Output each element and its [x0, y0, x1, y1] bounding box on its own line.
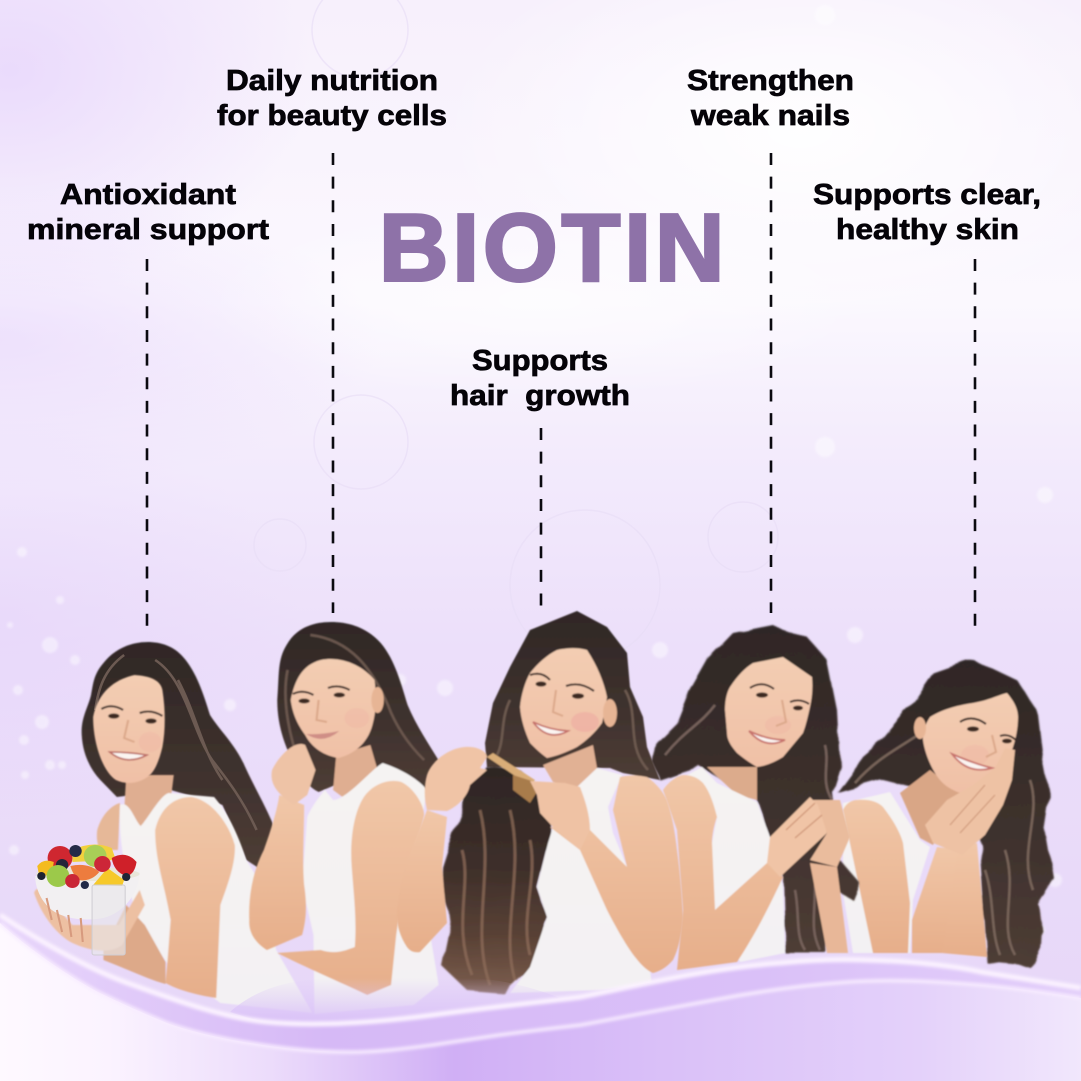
- label: supports clear healthy skin: healthy skin: [836, 214, 1019, 246]
- wooden comb: [487, 753, 537, 803]
- label: supports hair growth: hair growth: [450, 380, 630, 412]
- bowl of fruit: [35, 844, 140, 919]
- woman 5: hands to cheek: [837, 659, 1053, 967]
- label: antioxidant mineral support: [27, 179, 269, 246]
- label: daily nutrition for beauty cells: for beauty cells: [217, 100, 447, 132]
- woman 1: holding fruit bowl and water: [34, 642, 312, 1013]
- label: supports clear healthy skin: [813, 179, 1041, 246]
- water glass: [92, 885, 125, 955]
- label: strengthen weak nails: Strengthen: [687, 65, 854, 97]
- label: strengthen weak nails: [687, 65, 854, 132]
- label: antioxidant mineral support: mineral support: [27, 214, 269, 246]
- label: daily nutrition for beauty cells: [217, 65, 447, 132]
- label: antioxidant mineral support: Antioxidant: [60, 179, 236, 211]
- woman 4: holding hair strand: [653, 625, 860, 970]
- label: supports clear healthy skin: Supports clear,: [813, 179, 1041, 211]
- title: BIOTIN: BIOTIN: [379, 194, 728, 302]
- dashed connector lines: [147, 153, 975, 626]
- label: supports hair growth: Supports: [472, 345, 608, 377]
- label: daily nutrition for beauty cells: Daily nutrition: [226, 65, 438, 97]
- label: strengthen weak nails: weak nails: [690, 100, 850, 132]
- bottom wave: [0, 915, 1081, 1081]
- woman 3: combing hair: [397, 611, 683, 993]
- label: supports hair growth: [450, 345, 630, 412]
- woman 2: hand at chin: [249, 622, 440, 1014]
